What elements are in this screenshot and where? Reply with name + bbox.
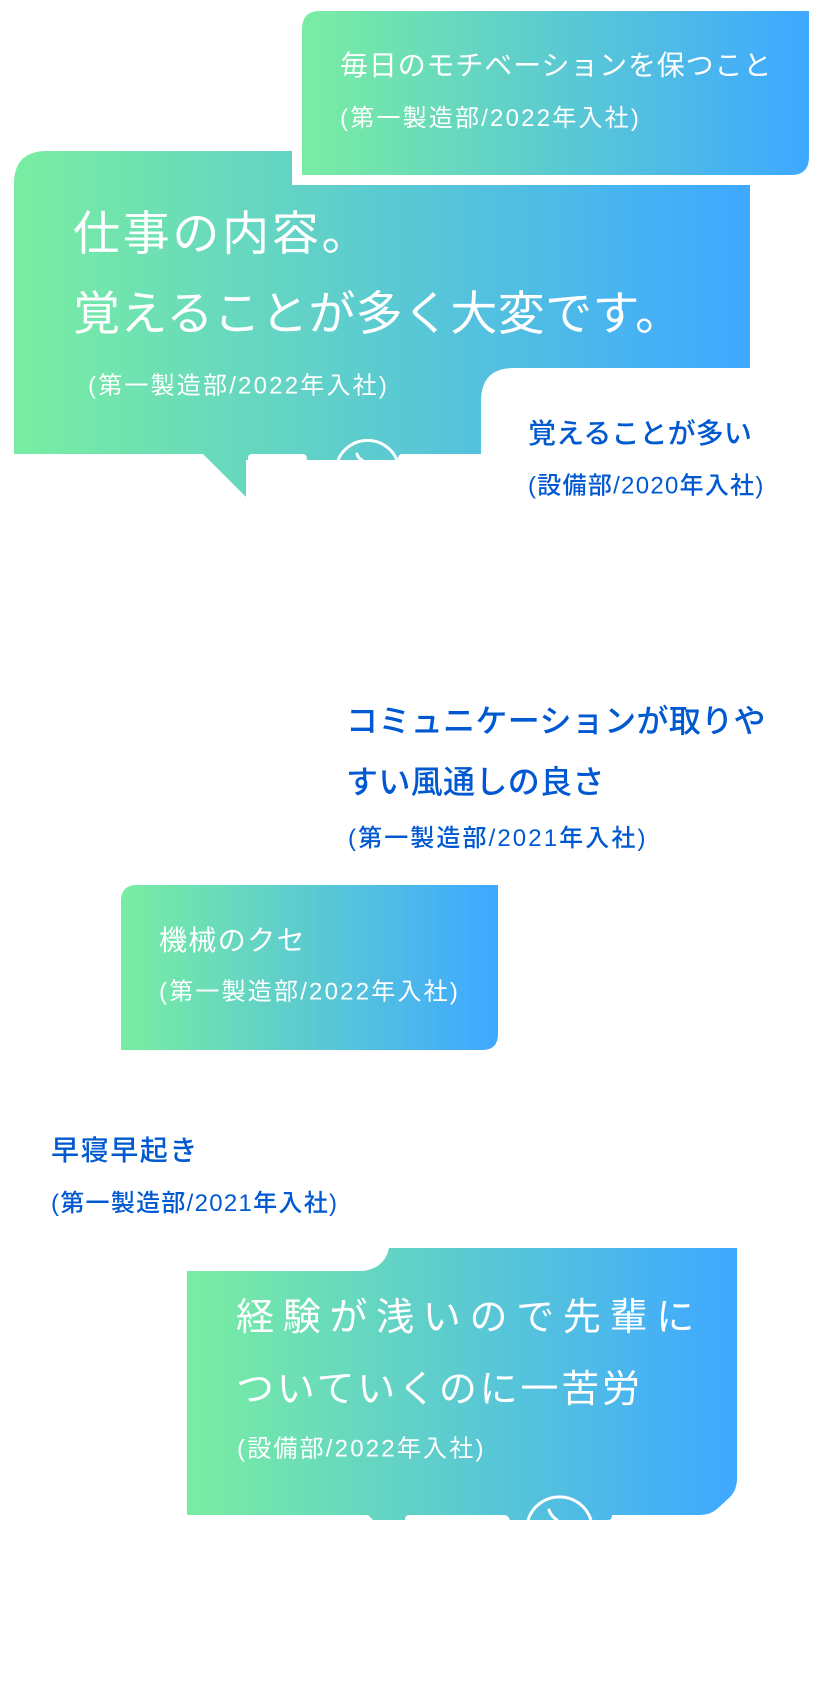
text block: open communication	[346, 703, 766, 852]
heading line 2: ついていくのに一苦労	[236, 1369, 643, 1411]
text block: open communication: コミュニケーションが取りや	[346, 703, 766, 739]
text block: many things to learn	[528, 418, 765, 500]
text block: many things to learn: (設備部/2020年入社)	[528, 472, 765, 500]
text block: many things to learn: 覚えることが多い	[528, 418, 752, 449]
heading line 2: 覚えることが多く大変です。	[73, 287, 682, 340]
text block: early to bed: (第一製造部/2021年入社)	[51, 1190, 338, 1217]
text block: early to bed: 早寝早起き	[51, 1135, 199, 1166]
icon: clock circle	[528, 1497, 591, 1520]
heading: 経験が浅いので先輩に	[236, 1297, 703, 1339]
text block: early to bed	[51, 1135, 338, 1217]
heading: 仕事の内容。	[73, 207, 371, 260]
panel: machine quirks	[121, 885, 498, 1050]
text block: open communication: (第一製造部/2021年入社)	[348, 825, 648, 852]
panel: inexperienced	[187, 1248, 737, 1520]
panel: daily motivation	[302, 11, 809, 175]
attribution: (第一製造部/2022年入社)	[340, 105, 641, 132]
heading: 毎日のモチベーションを保つこと	[340, 50, 772, 81]
attribution: (第一製造部/2022年入社)	[159, 978, 460, 1006]
panel: work content	[14, 151, 750, 497]
heading: 機械のクセ	[159, 925, 306, 956]
attribution: (設備部/2022年入社)	[237, 1436, 486, 1462]
bubble shape	[121, 885, 498, 1050]
bubble shape with tail	[14, 151, 750, 497]
attribution: (第一製造部/2022年入社)	[88, 372, 389, 400]
text block: open communication: すい風通しの良さ	[346, 764, 605, 800]
bubble shape	[187, 1248, 737, 1520]
icon: clock circle	[338, 440, 397, 460]
bubble shape	[302, 11, 809, 175]
